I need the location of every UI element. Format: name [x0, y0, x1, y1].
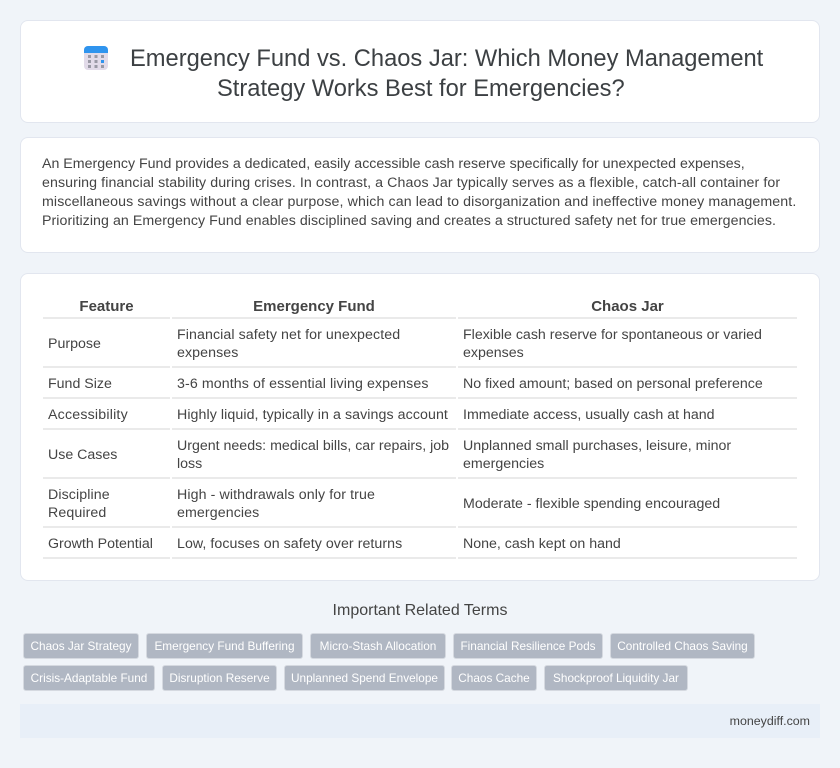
panel: title card	[20, 20, 820, 123]
tag: Chaos Cache	[458, 671, 530, 685]
cell: Purpose, Emergency Fund: expenses	[177, 345, 238, 361]
footer	[20, 704, 820, 738]
text block: introduction: An Emergency Fund provides a dedicated, easily accessible cash reserve specifically for unexpected expenses,	[42, 156, 745, 172]
row: Use Cases: Use Cases	[48, 447, 117, 463]
panel: intro card	[20, 137, 820, 253]
cell: Purpose, Chaos Jar: Flexible cash reserve for spontaneous or varied	[463, 327, 762, 343]
cell: Use Cases, Chaos Jar	[463, 438, 731, 472]
tag	[610, 633, 755, 659]
tag: Emergency Fund Buffering	[154, 639, 295, 653]
row: Discipline Required: Required	[48, 505, 106, 521]
text block: introduction	[42, 156, 796, 229]
panel: comparison table	[20, 273, 820, 581]
title	[130, 46, 764, 102]
cell: Discipline, Emergency Fund: emergencies	[177, 505, 259, 521]
tag: Micro-Stash Allocation	[320, 639, 436, 653]
tag	[453, 633, 603, 659]
tag: Shockproof Liquidity Jar	[553, 671, 679, 685]
tag: Disruption Reserve	[169, 671, 270, 685]
row: Discipline Required	[48, 487, 110, 521]
tag	[23, 665, 155, 691]
cell: Fund Size, Emergency Fund: 3-6 months of essential living expenses	[177, 376, 429, 392]
table header: Chaos Jar: Chaos Jar	[591, 298, 664, 315]
heading: Important Related Terms: Important Related Terms	[333, 602, 507, 619]
cell: Purpose, Chaos Jar	[463, 327, 762, 361]
cell: Growth Potential, Emergency Fund: Low, focuses on safety over returns	[177, 536, 402, 552]
cell: Accessibility, Chaos Jar: Immediate access, usually cash at hand	[463, 407, 715, 423]
tag: Controlled Chaos Saving	[617, 639, 748, 653]
text block: introduction: Prioritizing an Emergency Fund enables disciplined saving and creates a structured safety net for true emergencies.	[42, 213, 776, 229]
tag: Unplanned Spend Envelope	[291, 671, 438, 685]
row: Fund Size: Fund Size	[48, 376, 112, 392]
title line 2: Strategy Works Best for Emergencies?	[217, 76, 625, 102]
tag	[284, 665, 445, 691]
cell: Use Cases, Chaos Jar: emergencies	[463, 456, 544, 472]
tags row 1	[23, 633, 755, 659]
cell: Use Cases, Emergency Fund	[177, 438, 449, 472]
footer credit: moneydiff.com	[730, 714, 810, 728]
tag	[23, 633, 139, 659]
table header: Emergency Fund: Emergency Fund	[253, 298, 375, 315]
cell: Discipline, Emergency Fund: High - withdrawals only for true	[177, 487, 375, 503]
cell: Growth Potential, Chaos Jar: None, cash kept on hand	[463, 536, 621, 552]
cell: Purpose, Emergency Fund: Financial safety net for unexpected	[177, 327, 400, 343]
cell: Use Cases, Emergency Fund: loss	[177, 456, 202, 472]
cell: Discipline, Chaos Jar: Moderate - flexible spending encouraged	[463, 496, 720, 512]
cell: Purpose, Emergency Fund	[177, 327, 400, 361]
cell: Discipline, Emergency Fund	[177, 487, 375, 521]
row: Discipline Required: Discipline	[48, 487, 110, 503]
cell: Accessibility, Emergency Fund: Highly liquid, typically in a savings account	[177, 407, 448, 423]
cell: Use Cases, Chaos Jar: Unplanned small purchases, leisure, minor	[463, 438, 731, 454]
tag: Chaos Jar Strategy	[30, 639, 131, 653]
tag	[310, 633, 446, 659]
icon: calendar	[84, 46, 108, 70]
table header: Feature: Feature	[79, 298, 134, 315]
row: Accessibility: Accessibility	[48, 407, 128, 423]
cell: Purpose, Chaos Jar: expenses	[463, 345, 524, 361]
cell: Use Cases, Emergency Fund: Urgent needs: medical bills, car repairs, job	[177, 438, 449, 454]
row: Purpose: Purpose	[48, 336, 101, 352]
tag	[451, 665, 537, 691]
title line 1: Emergency Fund vs. Chaos Jar: Which Money Management	[130, 46, 763, 72]
text block: introduction: miscellaneous savings without a clear purpose, which can lead to disorganization and ineffective money management.	[42, 194, 796, 210]
tag	[146, 633, 303, 659]
tag: Crisis-Adaptable Fund	[31, 671, 147, 685]
row: Growth Potential: Growth Potential	[48, 536, 153, 552]
tag	[162, 665, 277, 691]
text block: introduction: ensuring financial stability during crises. In contrast, a Chaos Jar typically serves as a flexible, catch-all container for	[42, 175, 780, 191]
tags row 2	[23, 665, 688, 691]
tag	[544, 665, 688, 691]
tag: Financial Resilience Pods	[460, 639, 596, 653]
cell: Fund Size, Chaos Jar: No fixed amount; based on personal preference	[463, 376, 763, 392]
